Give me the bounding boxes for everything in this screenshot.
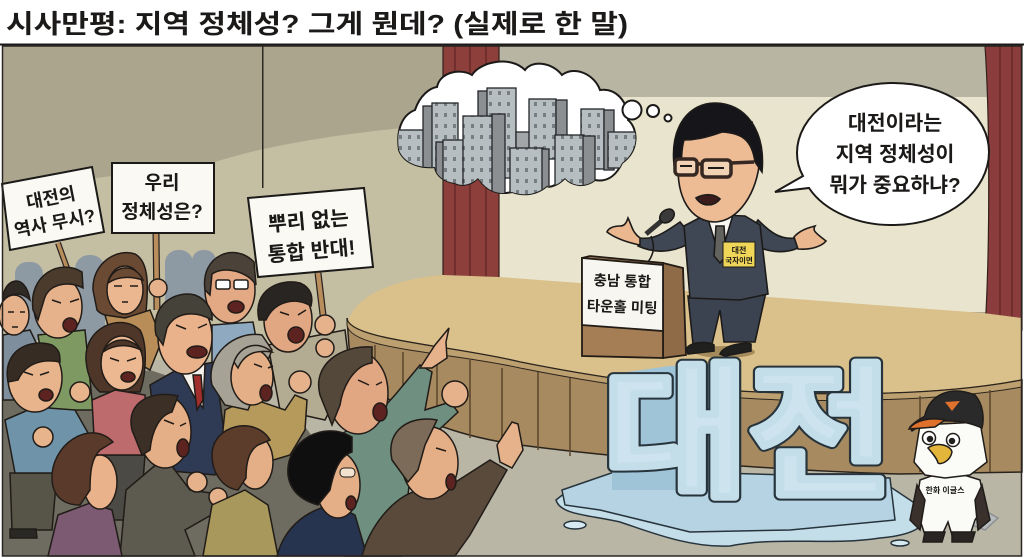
worried eagle mascot (909, 391, 998, 542)
protester: grey-haired woman (211, 334, 311, 470)
speech bubble: 뭐가 중요하냐? (829, 174, 961, 197)
head (678, 122, 760, 222)
protest sign: no rootless merger (248, 188, 373, 340)
protester: man in olive suit (120, 394, 227, 556)
right stage curtain (985, 46, 1022, 330)
jersey team name: 한화 이글스 (925, 485, 965, 495)
protester: man in green jacket pointing (319, 328, 468, 556)
audience seats (15, 250, 216, 345)
lapel badge: 국자이면 (725, 255, 753, 265)
protest sign: no rootless merger: 통합 반대! (267, 236, 356, 267)
protest sign: identity: 우리 (145, 172, 179, 194)
stage platform (347, 275, 1022, 474)
microphone (646, 206, 677, 262)
protest sign: history (2, 167, 104, 268)
protester: man in blue shirt (5, 343, 92, 538)
glasses (675, 159, 754, 177)
speech bubble: 지역 정체성이 (836, 143, 954, 166)
protest sign: no rootless merger: 뿌리 없는 (267, 207, 350, 237)
politician speaking (607, 103, 826, 358)
crowd of protesters (0, 253, 523, 556)
podium with sign (582, 256, 686, 358)
protester: shouting man holding sign (258, 282, 350, 420)
eyes (922, 432, 936, 444)
legs and shoes (686, 292, 766, 356)
crowd shadow between figures (3, 370, 370, 556)
tail feathers (972, 505, 998, 530)
ice sculpture letters: 대전 (603, 353, 893, 515)
protester: man in brown suit pointing (362, 419, 523, 556)
left stage curtain (443, 46, 499, 288)
protester: man with black hair and glasses (277, 431, 367, 556)
protester: woman in red jacket (86, 322, 148, 520)
protest sign: history: 역사 무시? (13, 205, 97, 241)
title bar (0, 0, 1024, 46)
feathered head (914, 422, 987, 478)
protester: boy far left (0, 281, 42, 400)
lapel badge: 대전 (732, 245, 746, 255)
speech bubble (775, 83, 989, 225)
title bar: 시사만평: 지역 정체성? 그게 뭔데? (실제로 한 말) (6, 9, 628, 39)
arms and hands (607, 218, 826, 252)
protester: man with glasses (205, 253, 262, 370)
thought bubbles (622, 100, 672, 122)
lapel badge (723, 242, 755, 267)
uniform body and legs (917, 470, 985, 535)
podium with sign: 타운홀 미팅 (587, 298, 658, 317)
thought cloud with buildings (396, 62, 638, 198)
buildings (396, 88, 638, 198)
protester: man in navy suit (150, 294, 225, 475)
podium with sign: 충남 통합 (593, 272, 651, 291)
torso in suit (684, 214, 768, 300)
protester: woman in yellow-brown jacket (203, 426, 278, 556)
protester: woman in purple (48, 433, 122, 556)
beak (928, 445, 952, 464)
protester: man in green shirt (32, 267, 93, 410)
speech bubble: 대전이라는 (848, 112, 942, 135)
protest sign: identity (112, 163, 214, 310)
melting ice pool (556, 470, 926, 546)
ice sculpture letters: 대전 (603, 353, 893, 515)
protest sign: identity: 정체성은? (121, 201, 203, 223)
cap (910, 391, 983, 431)
protest sign: history: 대전의 (25, 184, 77, 213)
protester: woman with tan jacket (93, 253, 167, 370)
